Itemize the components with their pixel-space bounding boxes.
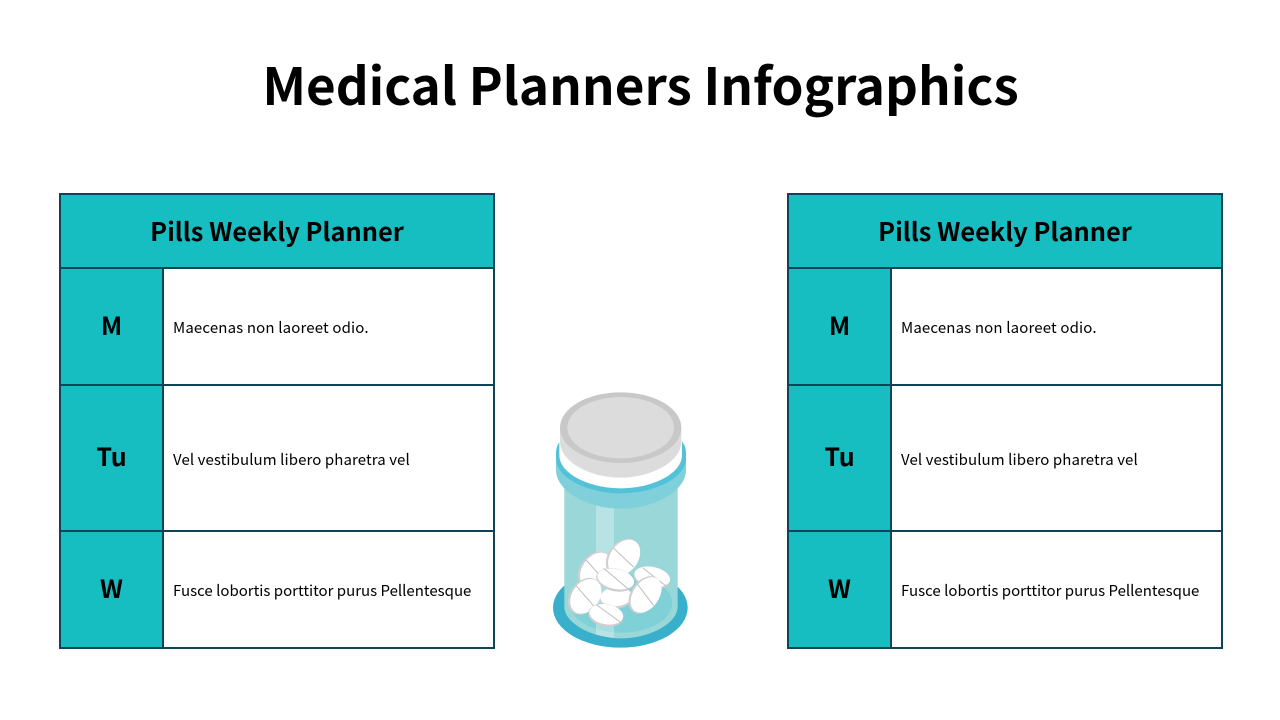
cap top xyxy=(567,397,674,458)
pill xyxy=(631,563,672,592)
cap side xyxy=(560,428,681,478)
day cell: Monday: M xyxy=(829,306,850,342)
bottle base shadow xyxy=(553,568,688,648)
cap rim xyxy=(560,392,681,463)
day cell: Monday xyxy=(787,267,892,386)
pills xyxy=(561,532,672,629)
day cell: Tuesday: Tu xyxy=(824,438,855,474)
planner heading xyxy=(59,193,495,269)
text: Monday note: Maecenas non laoreet odio. xyxy=(901,316,1097,338)
pill xyxy=(594,565,636,595)
planner heading: Pills Weekly Planner xyxy=(150,213,404,249)
bottle body xyxy=(564,480,678,638)
text: Tuesday note xyxy=(162,384,495,532)
text: Wednesday note: Fusce lobortis porttitor purus Pellentesque xyxy=(901,580,1199,600)
text: Monday note: Maecenas non laoreet odio. xyxy=(173,316,369,338)
day cell: Monday: M xyxy=(101,306,122,342)
pill xyxy=(599,585,634,610)
text: Tuesday note: Vel vestibulum libero pharetra vel xyxy=(173,449,410,470)
text: Monday note xyxy=(890,267,1223,386)
text: Wednesday note xyxy=(162,530,495,649)
text: Monday note xyxy=(162,267,495,386)
day cell: Wednesday xyxy=(787,530,892,649)
planner heading xyxy=(787,193,1223,269)
bottle highlight xyxy=(596,503,614,638)
icon: pill bottle xyxy=(553,392,688,648)
day cell: Monday xyxy=(59,267,164,386)
day cell: Tuesday xyxy=(59,384,164,532)
pill xyxy=(586,601,625,629)
bottle neck band xyxy=(556,455,686,509)
pill xyxy=(599,532,647,583)
pill xyxy=(561,571,608,621)
day cell: Wednesday: W xyxy=(828,570,851,606)
pill xyxy=(622,570,668,620)
pill xyxy=(571,545,619,596)
day cell: Wednesday: W xyxy=(100,570,123,606)
bottle floor xyxy=(570,574,672,633)
neck rim xyxy=(556,441,686,493)
text: Wednesday note xyxy=(890,530,1223,649)
panel: left weekly planner xyxy=(59,193,495,649)
day cell: Tuesday: Tu xyxy=(96,438,127,474)
white collar xyxy=(559,442,682,488)
panel: right weekly planner xyxy=(787,193,1223,649)
text: Tuesday note xyxy=(890,384,1223,532)
text: Wednesday note: Fusce lobortis porttitor purus Pellentesque xyxy=(173,580,471,600)
day cell: Wednesday xyxy=(59,530,164,649)
day cell: Tuesday xyxy=(787,384,892,532)
planner heading: Pills Weekly Planner xyxy=(878,213,1132,249)
text: Tuesday note: Vel vestibulum libero pharetra vel xyxy=(901,449,1138,470)
title: Medical Planners Infographics xyxy=(262,46,1019,120)
